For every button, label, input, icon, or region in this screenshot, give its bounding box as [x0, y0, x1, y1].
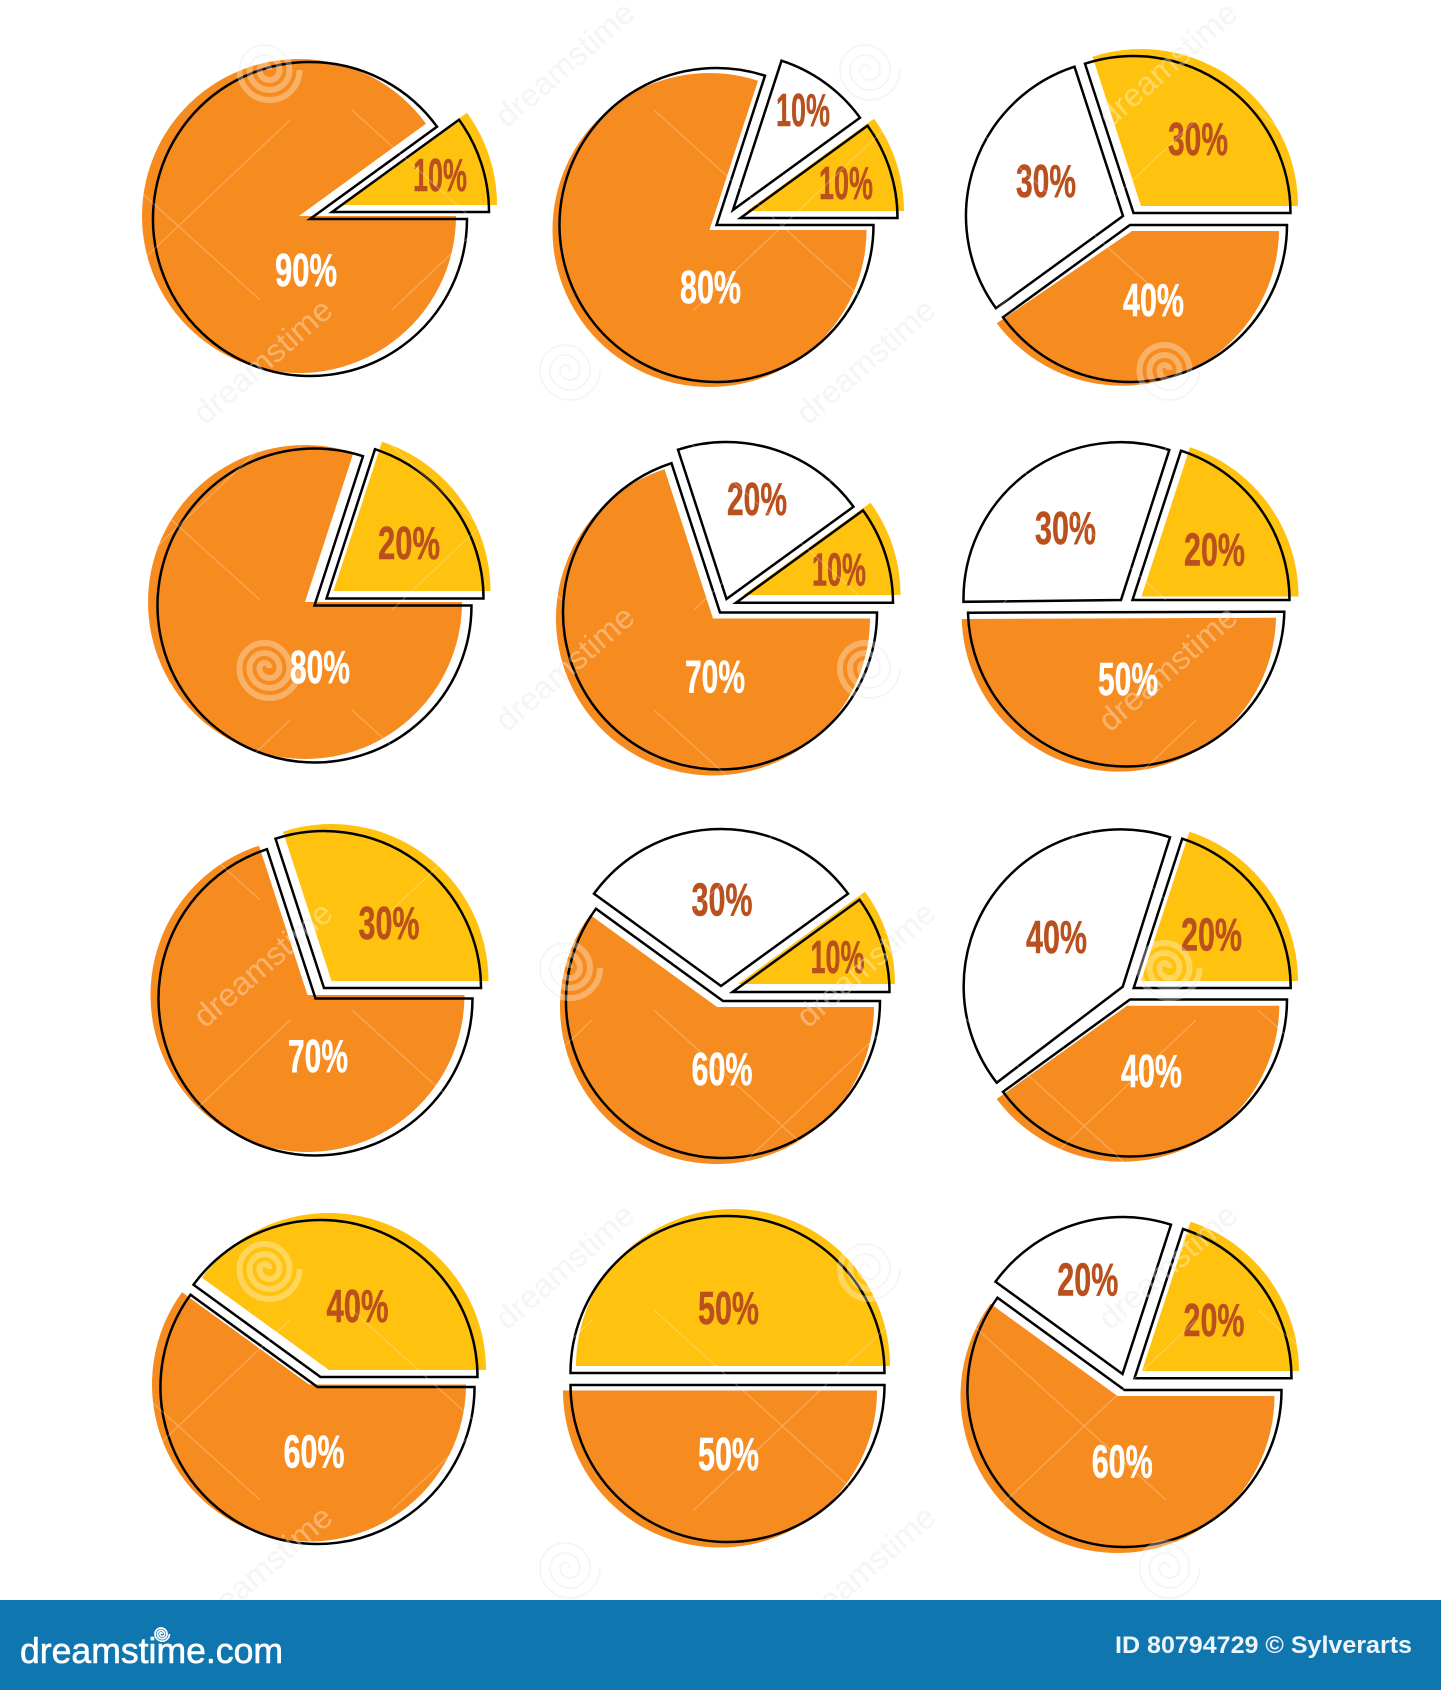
slice: orange 70%: 70%: [685, 650, 745, 702]
pie chart: 80% / 20%: [148, 442, 490, 763]
faint watermark behind charts: dreamstime: [789, 894, 942, 1034]
watermark overlay: dreamstime: [186, 1498, 339, 1638]
watermark overlay: dreamstime: [1091, 1196, 1244, 1336]
pie chart: 90% / 10%: [142, 59, 497, 376]
slice: yellow 20%: [1132, 447, 1298, 600]
slice: yellow 30%: 30%: [358, 897, 420, 949]
slice: orange 60%: [960, 1298, 1282, 1553]
slice: white 20%: [996, 1217, 1171, 1374]
slice: orange 40%: [997, 225, 1287, 386]
slice: orange 40%: 40%: [1123, 274, 1184, 326]
pie chart: 60% / 20% / 20%: [960, 1217, 1299, 1553]
slice: orange 80%: [552, 68, 874, 387]
slice: orange 50%: [563, 1385, 884, 1548]
slice: orange 50%: 50%: [698, 1428, 759, 1480]
slice: orange 60%: 60%: [692, 1043, 752, 1095]
pie chart: 70% / 20% / 10%: [556, 442, 900, 776]
slice: yellow 10%: [332, 113, 497, 212]
slice: yellow 20%: 20%: [1184, 1294, 1244, 1346]
slice: yellow 50%: 50%: [698, 1282, 759, 1334]
slice: orange 40%: [997, 1000, 1287, 1162]
slice: yellow 10%: 10%: [810, 931, 864, 983]
faint watermark behind charts: dreamstime: [488, 1196, 641, 1336]
slice: white 20%: 20%: [727, 473, 787, 525]
slice: orange 70%: [556, 463, 877, 776]
watermark overlay: dreamstime: [789, 291, 942, 431]
footer bar: [0, 1600, 1441, 1690]
pie chart: 70% / 30%: [150, 824, 488, 1156]
slice: white 30%: [594, 829, 848, 986]
pie chart: 60% / 40%: [152, 1213, 486, 1544]
faint watermark behind charts: dreamstime: [1091, 598, 1244, 738]
slice: white 30%: [963, 442, 1169, 602]
slice: yellow 10%: 10%: [819, 157, 873, 209]
slice: yellow 10%: 10%: [413, 149, 467, 201]
slice: white 30%: [966, 67, 1123, 308]
watermark overlay: dreamstime: [488, 0, 641, 134]
watermark overlay: dreamstime: [1091, 0, 1244, 134]
slice: yellow 40%: 40%: [326, 1280, 388, 1332]
pie chart: 60% / 30% / 10%: [560, 829, 895, 1164]
slice: orange 60%: 60%: [1092, 1436, 1153, 1488]
faint watermark behind charts: dreamstime: [1091, 0, 1244, 134]
slice: orange 80%: 80%: [290, 641, 350, 693]
slice: orange 50%: 50%: [1098, 653, 1158, 705]
slice: white 20%: 20%: [1057, 1254, 1118, 1306]
faint watermark behind charts: dreamstime: [789, 291, 942, 431]
watermark overlay: dreamstime: [186, 291, 339, 431]
slice: orange 90%: [142, 59, 467, 376]
slice: yellow 20%: 20%: [1181, 908, 1242, 960]
slice: yellow 50%: [570, 1209, 890, 1373]
watermark overlay: dreamstime: [1091, 598, 1244, 738]
slice: yellow 40%: [194, 1213, 486, 1377]
slice: orange 80%: 80%: [680, 261, 741, 313]
slice: yellow 20%: [326, 442, 490, 598]
slice: yellow 20%: [1134, 1222, 1299, 1378]
slice: orange 60%: [152, 1292, 475, 1544]
watermark overlay: dreamstime: [789, 1498, 942, 1638]
watermark overlay: dreamstime: [488, 598, 641, 738]
slice: white 10%: [733, 61, 860, 210]
slice: orange 70%: 70%: [288, 1030, 348, 1082]
slice: white 40%: [964, 829, 1170, 1083]
slice: yellow 30%: [1085, 49, 1298, 213]
faint watermark behind charts: [186, 0, 1244, 1638]
pie chart: 40% / 20% / 40%: [964, 829, 1298, 1162]
slice: white 30%: 30%: [1035, 502, 1096, 554]
slice: white 10%: 10%: [776, 84, 830, 136]
slice: white 40%: 40%: [1026, 911, 1087, 963]
slice: yellow 10%: [736, 503, 900, 603]
watermark overlay: dreamstime: [186, 894, 339, 1034]
slice: orange 50%: [962, 612, 1284, 772]
faint watermark behind charts: dreamstime: [488, 0, 641, 134]
faint watermark behind charts: dreamstime: [186, 291, 339, 431]
pie chart: 30% / 20% / 50%: [962, 442, 1298, 772]
slice: yellow 30%: 30%: [1168, 113, 1228, 165]
faint watermark behind charts: dreamstime: [488, 598, 641, 738]
watermark overlay: dreamstime: [488, 1196, 641, 1336]
pie chart: 50% / 50%: [563, 1209, 890, 1548]
faint watermark behind charts: dreamstime: [186, 1498, 339, 1638]
slice: orange 40%: 40%: [1121, 1045, 1182, 1097]
pie chart: 80% / 10% / 10%: [552, 61, 904, 387]
slice: yellow 10%: [740, 119, 904, 218]
slice: white 30%: 30%: [692, 874, 752, 926]
slice: yellow 30%: [276, 824, 488, 988]
slice: orange 90%: 90%: [275, 244, 337, 296]
pie chart: 30% / 30% / 40%: [966, 49, 1298, 386]
faint watermark behind charts: dreamstime: [789, 1498, 942, 1638]
footer logo: dreamstime.com: dreamstime.com: [20, 1630, 283, 1671]
slice: yellow 20%: 20%: [1184, 524, 1245, 576]
slice: orange 80%: [148, 445, 472, 763]
slice: orange 60%: 60%: [284, 1426, 344, 1478]
slice: white 20%: [678, 442, 854, 599]
slice: white 30%: 30%: [1016, 155, 1076, 207]
slice: yellow 10%: [732, 892, 895, 992]
slice: yellow 10%: 10%: [812, 544, 866, 596]
faint watermark behind charts: dreamstime: [186, 894, 339, 1034]
faint watermark behind charts: dreamstime: [1091, 1196, 1244, 1336]
slice: orange 70%: [150, 846, 472, 1156]
slice: yellow 20%: 20%: [378, 517, 440, 569]
slice: orange 60%: [560, 909, 880, 1164]
footer credit: ID 80794729 © Sylverarts: [1115, 1632, 1412, 1659]
slice: yellow 20%: [1134, 832, 1298, 988]
watermark overlay: dreamstime: [789, 894, 942, 1034]
